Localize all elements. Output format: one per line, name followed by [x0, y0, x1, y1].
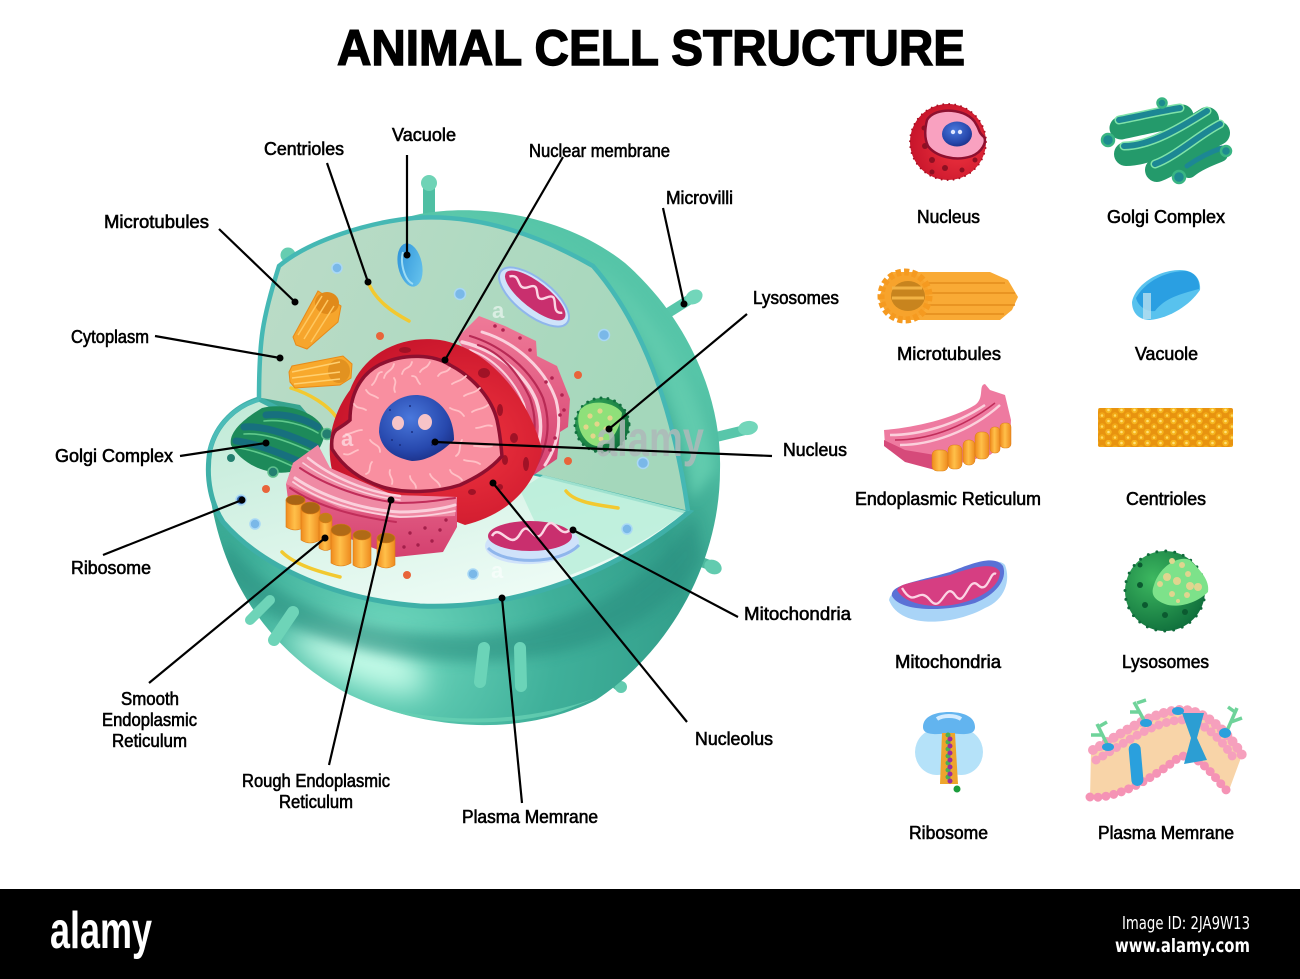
- footer bar: [0, 889, 1300, 979]
- legend labels: [855, 207, 1234, 843]
- small granules: [236, 263, 648, 579]
- main cell diagram: [207, 175, 759, 725]
- diagram labels: Microvilli: [666, 188, 733, 208]
- legend labels: Ribosome: [909, 823, 988, 843]
- diagram labels: Nucleolus: [695, 729, 773, 749]
- cell body: [207, 210, 720, 725]
- diagram labels: Plasma Memrane: [462, 807, 598, 827]
- rough ER upper right: [457, 316, 570, 481]
- icon: centrioles: [1098, 408, 1233, 447]
- rough ER lower left: [286, 445, 457, 557]
- chromatin squiggles: [344, 362, 492, 488]
- diagram labels: Cytoplasm: [71, 327, 149, 347]
- diagram labels: Reticulum: [112, 731, 187, 751]
- cell floor: [208, 399, 689, 606]
- icon: plasma membrane: [1090, 700, 1242, 798]
- diagram labels: Golgi Complex: [55, 446, 173, 466]
- footer image id: Image ID: 2JA9W13: [1122, 913, 1250, 934]
- watermark alamy: alamy: [596, 411, 704, 467]
- footer logo: alamy: [50, 902, 152, 960]
- legend labels: Nucleus: [917, 207, 980, 227]
- nucleus cross-section: [332, 356, 502, 491]
- icon: golgi complex: [1102, 98, 1231, 183]
- legend labels: Golgi Complex: [1107, 207, 1225, 227]
- icon: vacuole: [1132, 270, 1200, 320]
- watermark small marks: [341, 298, 505, 583]
- legend labels: Plasma Memrane: [1098, 823, 1234, 843]
- back wall cytoplasm: [259, 217, 689, 511]
- icon: nucleus: [910, 104, 986, 180]
- diagram labels: Microtubules: [104, 212, 209, 232]
- body highlights: [222, 212, 716, 722]
- legend labels: Endoplasmic Reticulum: [855, 489, 1041, 509]
- mitochondrion lower: [484, 521, 580, 566]
- title: ANIMAL CELL STRUCTURE: [337, 20, 965, 76]
- legend labels: Mitochondria: [895, 652, 1002, 672]
- watermark small marks: a: [341, 426, 354, 451]
- legend labels: Vacuole: [1135, 344, 1198, 364]
- diagram labels: Nucleus: [783, 440, 847, 460]
- watermark small marks: a: [491, 558, 504, 583]
- microvilli: [280, 175, 759, 693]
- nucleolus: [379, 395, 454, 461]
- diagram labels: Centrioles: [264, 139, 344, 159]
- icon: ribosome: [915, 712, 983, 792]
- floor shade at right: [520, 475, 686, 575]
- vacuole: [394, 241, 426, 289]
- microvilli on front of body: [250, 600, 521, 686]
- nuclear envelope red sphere: [330, 339, 542, 525]
- footer url: www.alamy.com: [1115, 935, 1250, 957]
- diagram labels: Vacuole: [392, 125, 456, 145]
- legend labels: Lysosomes: [1122, 652, 1209, 672]
- diagram labels: Reticulum: [279, 792, 353, 812]
- diagram labels: [55, 125, 852, 827]
- diagram labels: Ribosome: [71, 558, 151, 578]
- golgi complex in cell: [227, 406, 332, 477]
- panel: organelle legend: [855, 98, 1242, 843]
- diagram labels: Endoplasmic: [102, 710, 197, 730]
- diagram labels: Mitochondria: [744, 604, 852, 624]
- legend labels: Centrioles: [1126, 489, 1206, 509]
- diagram labels: Smooth: [121, 689, 179, 709]
- legend labels: Microtubules: [897, 344, 1001, 364]
- watermark small marks: a: [492, 298, 505, 323]
- leader lines: [103, 155, 772, 803]
- diagram labels: Lysosomes: [753, 288, 839, 308]
- icon: mitochondria: [889, 560, 1007, 622]
- membrane rim: [259, 217, 688, 511]
- icon: lysosome: [1125, 551, 1208, 631]
- lysosome in cell: [575, 398, 629, 452]
- microtubules in cell: [289, 291, 352, 388]
- icon: endoplasmic reticulum: [884, 384, 1011, 471]
- diagram labels: Rough Endoplasmic: [242, 771, 390, 791]
- centrioles: [282, 282, 618, 577]
- mitochondrion upper: [490, 257, 578, 337]
- icon: microtubules: [878, 272, 1018, 320]
- smooth ER orange tubes: [286, 495, 395, 568]
- diagram labels: Nuclear membrane: [529, 141, 670, 161]
